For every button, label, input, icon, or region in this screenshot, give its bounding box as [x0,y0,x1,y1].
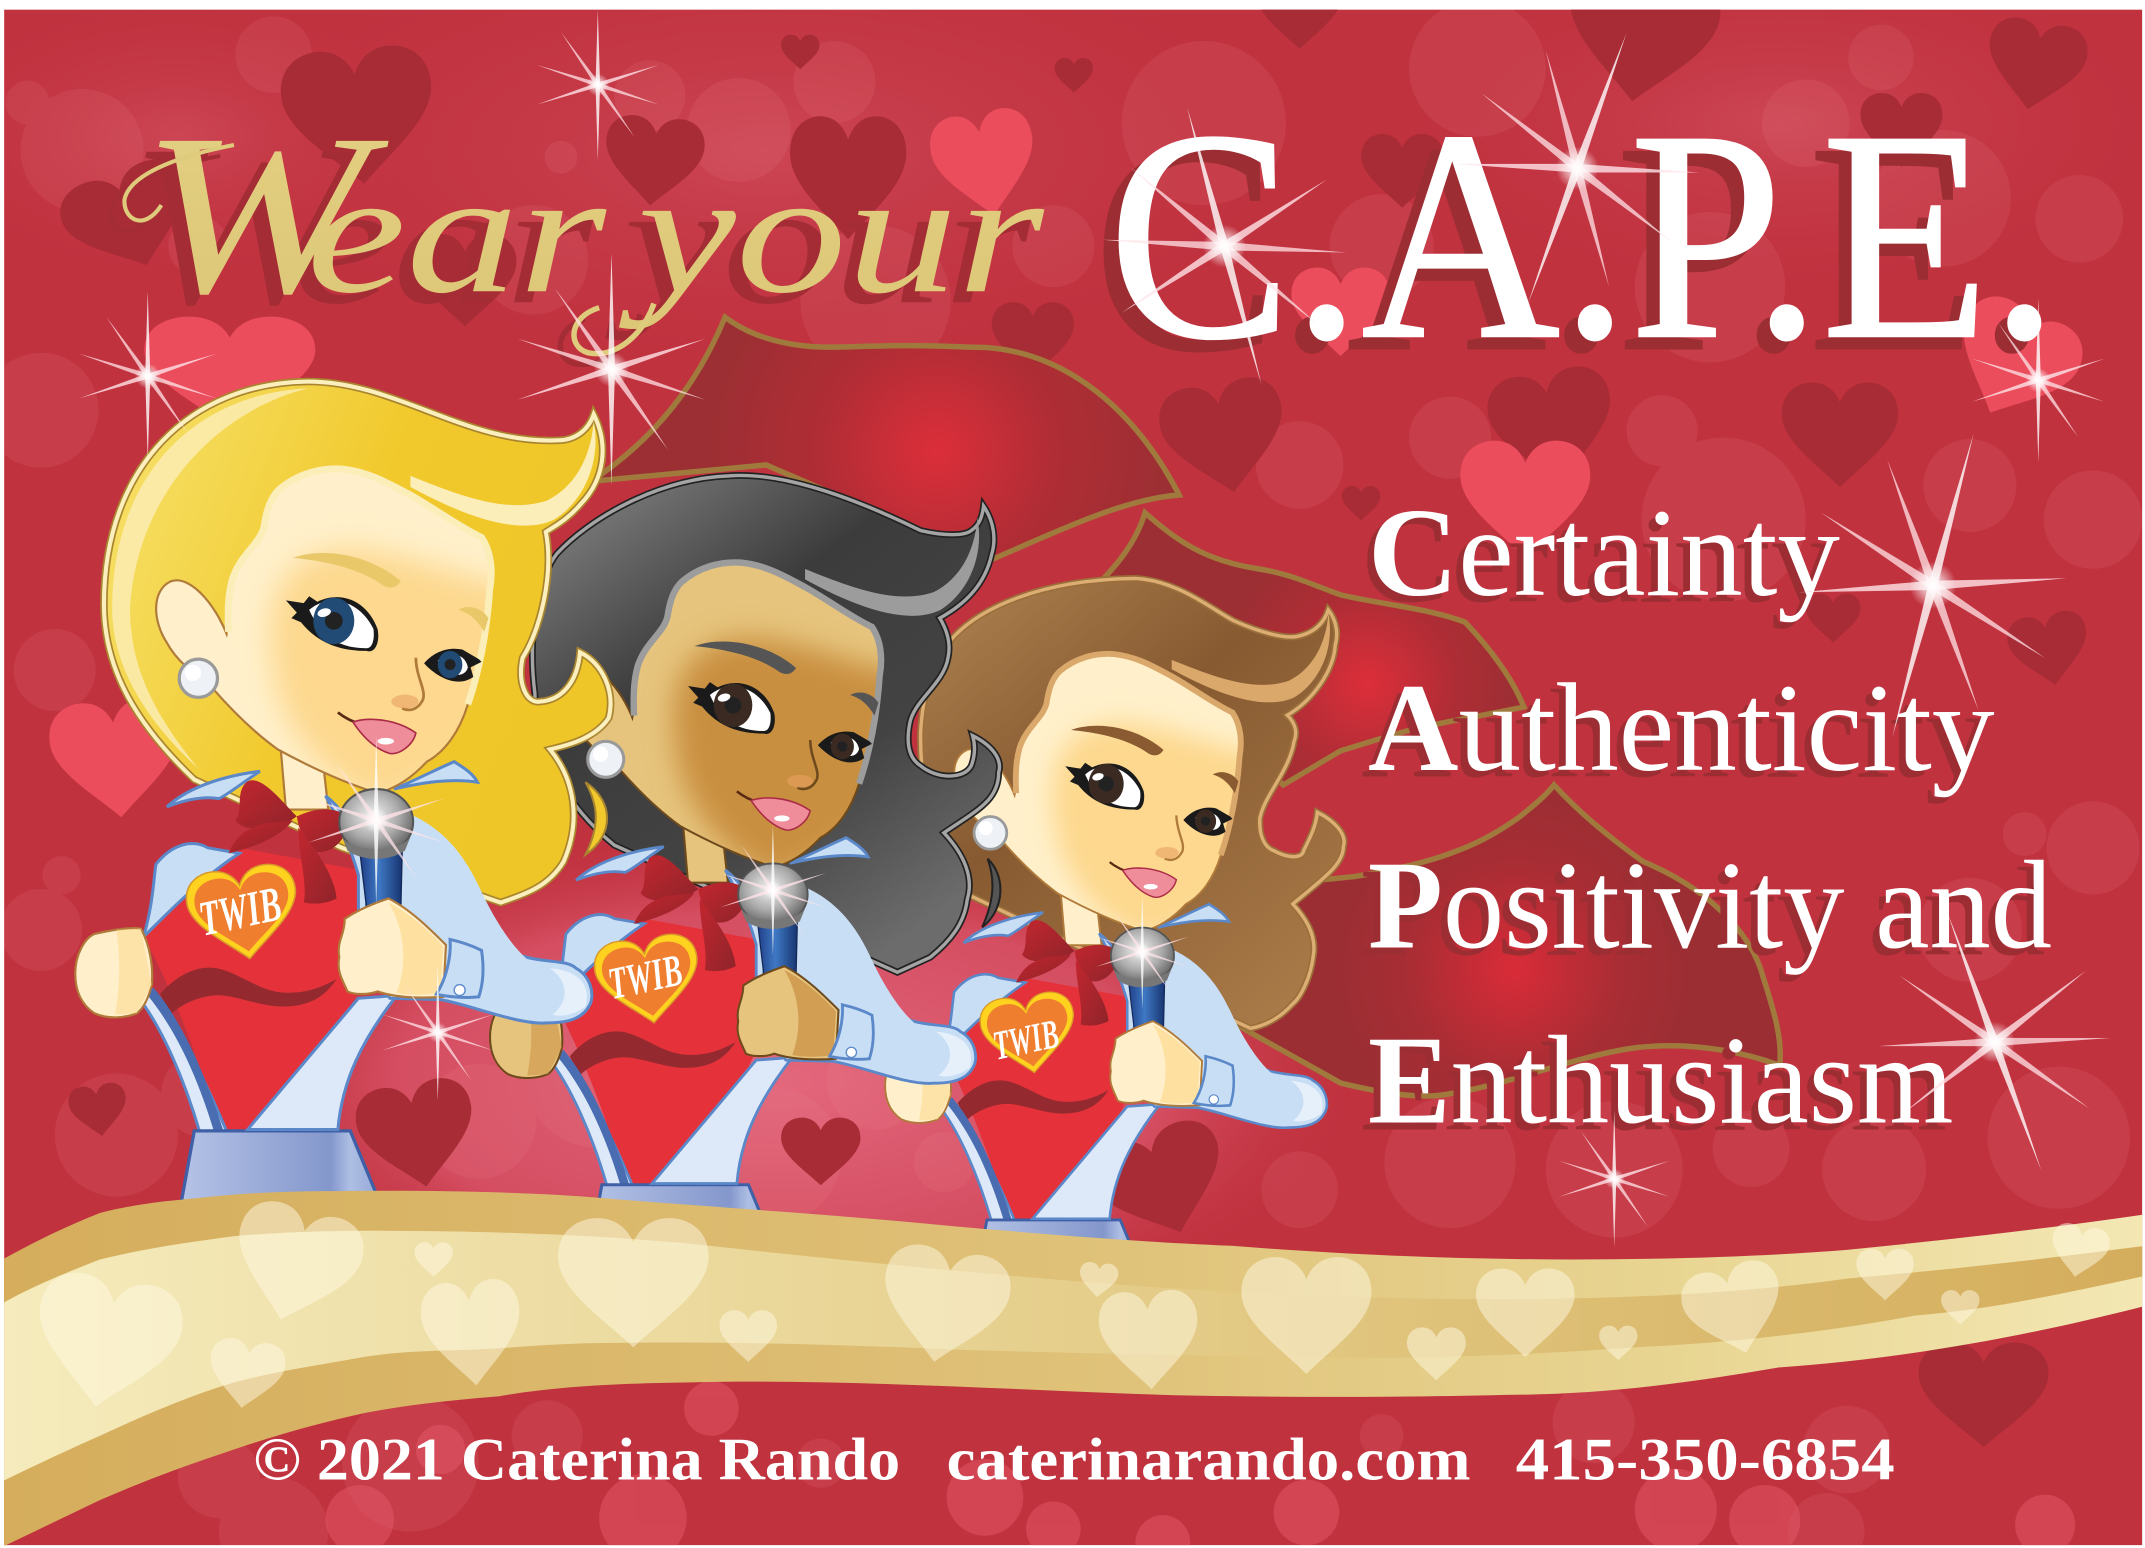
heroine: blonde [75,382,611,1206]
heroine: black hair [490,475,1000,1255]
Authenticity: Authenticity [1368,659,1995,798]
Positivity and: Positivity and [1368,837,2052,976]
phone: 415-350-6854 [1516,1427,1895,1494]
blonde figure [75,421,596,1206]
title script shadow: W [127,97,375,352]
brunette logo text: TWIB [989,1010,1063,1069]
list shadow: Certainty [1361,491,1833,630]
title script shadow [145,152,1031,368]
copyright: © 2021 Caterina Rando [253,1427,900,1494]
brunette mic sparkle [1095,894,1189,1009]
footer contact line [253,1427,1895,1494]
list shadow: Enthusiasm [1361,1019,1947,1158]
cape: middle heroine [1094,513,1524,785]
gold ribbon [0,1191,2145,1548]
title script: Wear your [122,140,1044,356]
Enthusiasm: Enthusiasm [1368,1012,1953,1151]
brunette figure [885,613,1330,1284]
brunette hair [921,578,1344,1028]
blonde hair crescent [585,782,607,855]
ribbon hearts [25,1194,2112,1419]
list shadow: Positivity and [1361,844,2045,983]
capes [591,317,1780,1096]
Certainty: Certainty [1368,484,1840,623]
black hair mic sparkle [719,825,827,956]
title script: Wear your: W [141,86,389,341]
black hair logo text: TWIB [604,945,687,1009]
acronym list [1361,484,2052,1158]
website: caterinarando.com [947,1427,1471,1494]
title script shadow: ear [293,146,593,340]
cape: front heroine [591,317,1179,561]
hair crescent [982,859,1000,927]
sparkles [78,0,2145,1247]
title: C.A.P.E.: C.A.P.E. [1108,69,2059,402]
title script: Wear your: ear [306,135,607,329]
blonde hair highlight [112,388,308,769]
heroine: brunette [885,578,1344,1284]
list shadow [1361,491,2045,1158]
black hair shape [532,475,999,972]
bright bokeh circles [326,1381,2075,1548]
blonde mic sparkle [307,736,446,905]
list shadow: Authenticity [1361,666,1988,805]
title script: Wear your: your [618,135,1045,329]
blonde hair [104,382,611,903]
black hair figure [490,518,979,1255]
title script shadow: your [605,146,1031,340]
cape: back heroine [1238,785,1780,1096]
title: C.A.P.E.: C.A.P.E. [1093,82,2047,415]
light hearts [46,104,2093,823]
blonde logo text: TWIB [194,876,286,946]
